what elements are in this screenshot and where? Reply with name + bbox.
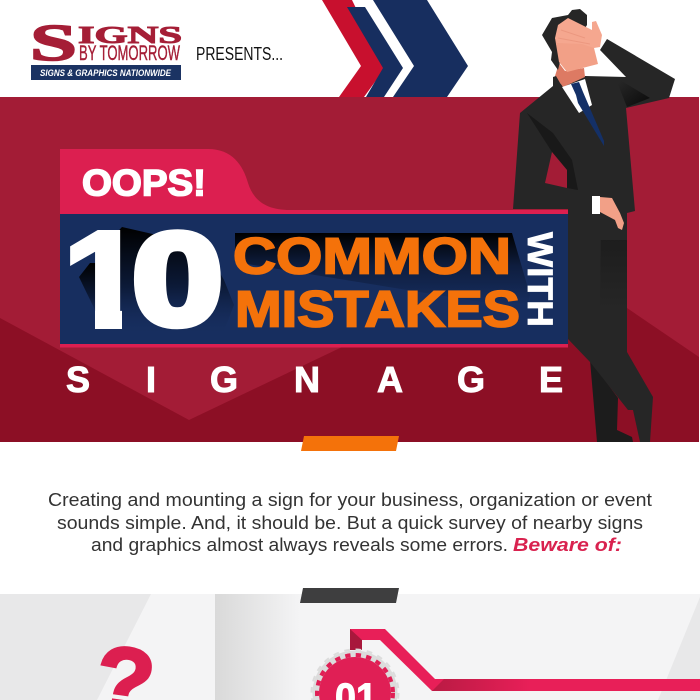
navy panel [60, 214, 568, 344]
logo: Signs By Tomorrow: SIGNS & GRAPHICS NATIONWIDE [40, 68, 172, 79]
arm gap [545, 152, 567, 188]
heading with: WITH [520, 232, 559, 327]
cuff [592, 196, 600, 214]
oops tab [60, 149, 568, 214]
dark tab [300, 588, 399, 603]
number badge 01 [312, 650, 398, 700]
oops text: OOPS! [82, 162, 206, 204]
tie [571, 82, 604, 146]
trouser shade [600, 222, 627, 310]
flag shadow [79, 263, 104, 326]
face [555, 38, 598, 72]
number 0: 0 [132, 206, 222, 352]
sleeve shadow [615, 77, 650, 107]
lower grey panel [0, 594, 700, 700]
number shadow [110, 227, 234, 336]
hero background [0, 97, 699, 442]
back leg [590, 360, 633, 442]
logo: Signs By Tomorrow: S [30, 15, 77, 72]
ribbon connector [350, 629, 700, 691]
logo: Signs By Tomorrow [30, 15, 182, 80]
intro paragraph: and graphics almost always reveals some errors. [91, 535, 508, 555]
man covering his face [513, 9, 675, 442]
hand at waist [600, 197, 624, 230]
jacket fold [527, 113, 578, 190]
chevron arrows [322, 0, 468, 97]
orange tab [301, 436, 399, 451]
heading common: COMMON [233, 228, 511, 284]
logo: Signs By Tomorrow: BY TOMORROW [79, 42, 180, 65]
jacket [513, 39, 675, 240]
intro paragraph: sounds simple. And, it should be. But a quick survey of nearby signs [57, 513, 643, 533]
shirt [562, 79, 592, 113]
signage word: SIGNAGE [66, 359, 563, 400]
heading shadow [235, 233, 530, 322]
logo: Signs By Tomorrow: IGNS [78, 23, 182, 49]
neck [555, 63, 585, 87]
hair [542, 9, 587, 70]
collar left [553, 76, 563, 88]
front leg [568, 205, 653, 442]
intro paragraph [48, 490, 652, 555]
intro paragraph: Beware of: [513, 535, 622, 555]
presents label: PRESENTS... [196, 44, 283, 64]
intro paragraph: Creating and mounting a sign for your business, organization or event [48, 490, 652, 510]
heading mistakes: MISTAKES [235, 280, 520, 338]
bottom rule [60, 344, 568, 348]
number 1: 1 [62, 203, 146, 357]
title banner [60, 149, 568, 357]
hand on forehead [555, 18, 602, 48]
